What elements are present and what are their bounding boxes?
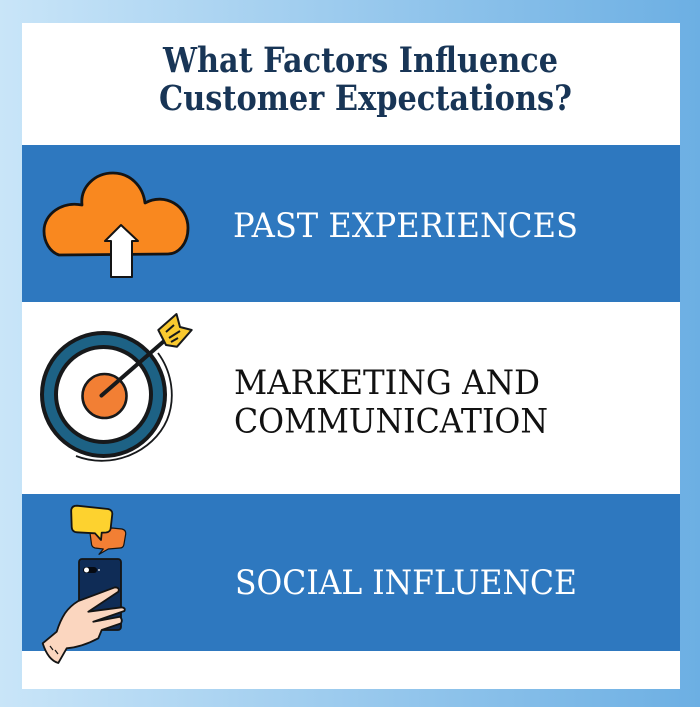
orange chat bubble	[90, 528, 126, 554]
panel: social influence	[22, 494, 680, 663]
title	[159, 40, 572, 119]
title: What Factors Influence	[162, 40, 558, 81]
label: marketing and communication: COMMUNICATION	[234, 402, 548, 442]
icon: target with arrow	[42, 314, 192, 461]
hand	[43, 587, 125, 663]
phone	[79, 559, 121, 630]
label: social influence: SOCIAL INFLUENCE	[235, 563, 577, 603]
panel: past experiences	[22, 145, 680, 302]
icon: cloud upload	[44, 173, 188, 277]
panel: marketing and communication	[42, 314, 548, 461]
label: marketing and communication	[234, 363, 548, 442]
title: Customer Expectations?	[159, 78, 572, 119]
yellow chat bubble	[71, 506, 112, 540]
label: past experiences: PAST EXPERIENCES	[233, 206, 578, 246]
label: marketing and communication: MARKETING AND	[234, 363, 540, 403]
icon: hand holding phone with chat bubbles	[43, 506, 126, 663]
